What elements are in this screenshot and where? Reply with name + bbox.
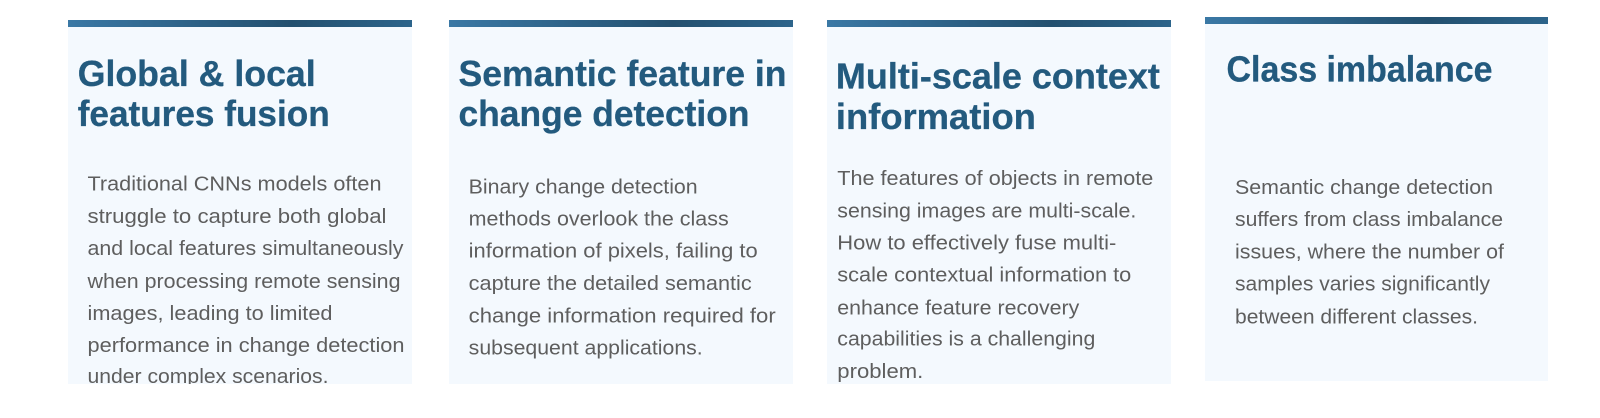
panel background <box>68 20 412 384</box>
panel: multi-scale context information <box>827 20 1171 384</box>
body text <box>469 175 776 359</box>
panel background <box>1205 17 1548 381</box>
body text: when processing remote sensing <box>86 270 401 293</box>
body text: enhance feature recovery <box>837 296 1080 319</box>
heading: features fusion <box>78 93 330 134</box>
body text: capabilities is a challenging <box>837 328 1095 351</box>
body text: How to effectively fuse multi- <box>837 231 1116 254</box>
body text: images, leading to limited <box>88 302 332 325</box>
panel: class imbalance <box>1205 17 1548 381</box>
body text: problem. <box>837 360 923 383</box>
body text: samples varies significantly <box>1235 273 1491 296</box>
body text: scale contextual information to <box>837 264 1131 287</box>
body text: The features of objects in remote <box>837 167 1153 190</box>
heading <box>78 53 330 134</box>
body text: capture the detailed semantic <box>469 272 752 295</box>
body text: information of pixels, failing to <box>469 240 758 263</box>
body text <box>1235 176 1504 328</box>
body text: change information required for <box>469 304 776 327</box>
panel: global and local features fusion <box>68 20 412 388</box>
body text: struggle to capture both global <box>88 205 386 228</box>
body text: performance in change detection <box>88 334 404 357</box>
body text: sensing images are multi-scale. <box>837 200 1136 223</box>
heading: Multi-scale context <box>836 56 1160 97</box>
body text: between different classes. <box>1235 305 1478 328</box>
body text: subsequent applications. <box>469 336 703 359</box>
heading <box>458 53 786 134</box>
top accent bar <box>827 20 1171 27</box>
heading: Semantic feature in <box>458 53 786 94</box>
panel: semantic feature in change detection <box>449 20 793 384</box>
body text <box>837 167 1153 383</box>
top accent bar <box>1205 17 1548 24</box>
top accent bar <box>68 20 412 27</box>
body text: and local features simultaneously <box>88 237 404 260</box>
heading: Class imbalance <box>1226 49 1492 90</box>
body text <box>86 173 405 388</box>
body text: under complex scenarios. <box>88 365 328 388</box>
heading <box>836 56 1160 137</box>
body text: Binary change detection <box>469 175 698 198</box>
panel background <box>827 20 1171 384</box>
body text: Semantic change detection <box>1235 176 1493 199</box>
heading: Global & local <box>78 53 316 94</box>
body text: issues, where the number of <box>1235 240 1504 263</box>
heading: change detection <box>458 93 750 134</box>
heading: information <box>836 96 1036 137</box>
body text: suffers from class imbalance <box>1235 208 1503 231</box>
body text: Traditional CNNs models often <box>88 173 382 196</box>
panel background <box>449 20 793 384</box>
top accent bar <box>449 20 793 27</box>
body text: methods overlook the class <box>469 208 729 231</box>
